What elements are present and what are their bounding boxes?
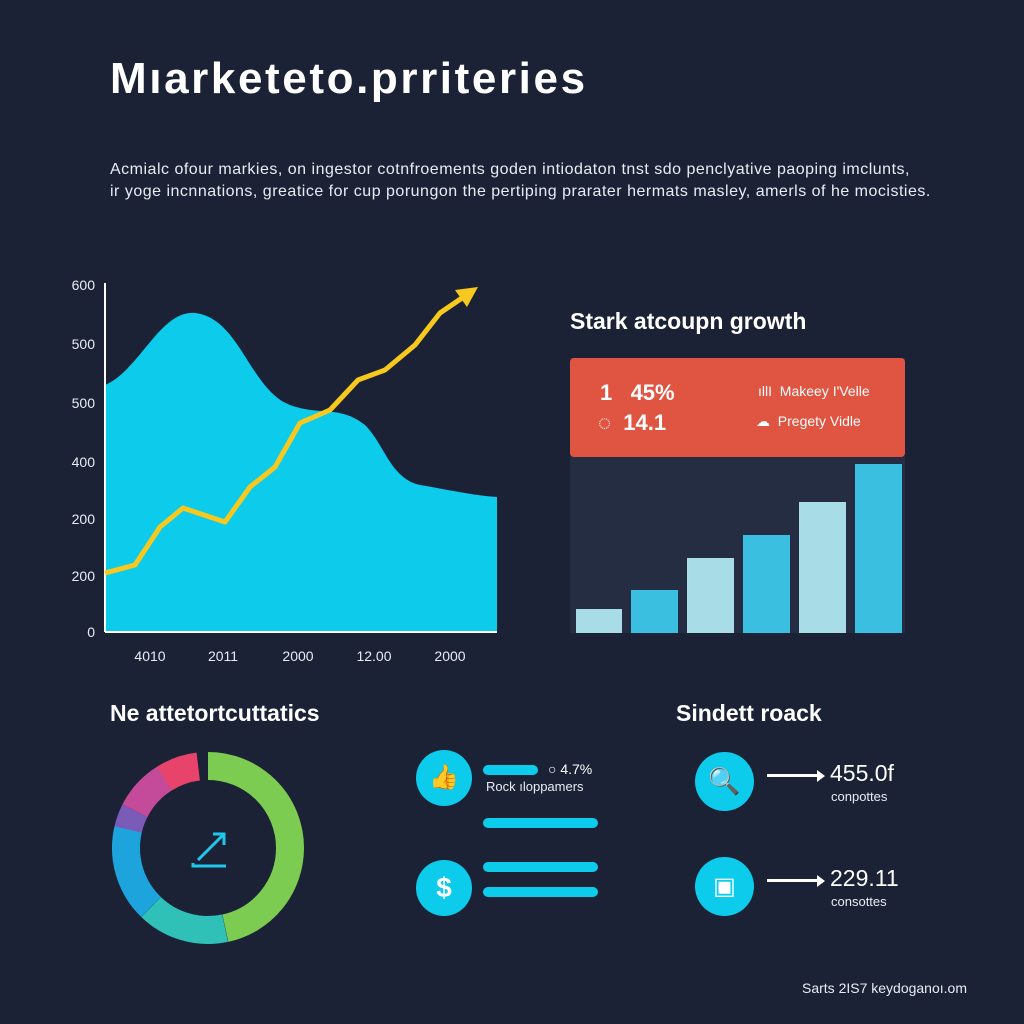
area chart (72, 277, 497, 664)
stat: search: conpottes (831, 789, 887, 804)
area (105, 313, 497, 632)
stat: search: 455.0f (830, 760, 894, 786)
stat: search (695, 752, 894, 811)
red stats box (570, 358, 905, 457)
bar chart heading: Stark atcoupn growth (570, 308, 806, 334)
y-axis labels: 500 (72, 336, 95, 352)
intro text: ir yoge incnnations, greatice for cup porungon the pertiping prarater hermats masley, amerls of he mocisties. (110, 183, 931, 200)
y-axis labels: 400 (72, 454, 95, 470)
stat: box: consottes (831, 894, 887, 909)
y-axis labels: 200 (72, 511, 95, 527)
intro text: Acmialc ofour markies, on ingestor cotnfroements goden intiodaton tnst sdo penclyative paoping imclunts, (110, 161, 910, 178)
red stats box: ◌ 14.1 (598, 410, 666, 435)
y-axis labels (72, 277, 95, 640)
list item: thumbs: Rock ıloppamers (486, 779, 584, 794)
bar chart panel (570, 358, 905, 633)
list item: dollar (416, 860, 598, 916)
x labels: 12.00 (356, 648, 392, 664)
stat: box (695, 857, 899, 916)
stat: search: 🔍 (708, 766, 741, 796)
y-axis labels: 500 (72, 395, 95, 411)
list item: thumbs: ○ 4.7% (548, 761, 592, 777)
footer: Sarts 2IS7 keydoganoı.om (802, 980, 967, 996)
x labels: 2000 (434, 648, 466, 664)
red stats box: 1 45% (600, 380, 675, 405)
list item: thumbs: 👍 (429, 764, 459, 791)
y-axis labels: 200 (72, 568, 95, 584)
x labels: 4010 (134, 648, 166, 664)
list item: dollar: $ (436, 872, 452, 903)
red stats box: ıllI Makeey I'Velle (758, 383, 870, 399)
x labels (134, 648, 466, 664)
list item: thumbs (416, 750, 598, 828)
stat: box: 229.11 (830, 865, 899, 891)
y-axis labels: 600 (72, 277, 95, 293)
x labels: 2000 (282, 648, 314, 664)
y-axis labels: 0 (87, 624, 95, 640)
trend line (105, 287, 478, 573)
donut heading: Ne attetortcuttatics (110, 700, 320, 726)
intro text (110, 161, 931, 200)
x labels: 2011 (208, 648, 238, 664)
stat: box: ▣ (713, 873, 736, 900)
bars (576, 609, 622, 633)
red stats box: ☁ Pregety Vidle (756, 413, 861, 429)
donut chart (112, 752, 304, 944)
right heading: Sindett roack (676, 700, 822, 726)
title: Mıarketeto.prriteries (110, 54, 588, 103)
